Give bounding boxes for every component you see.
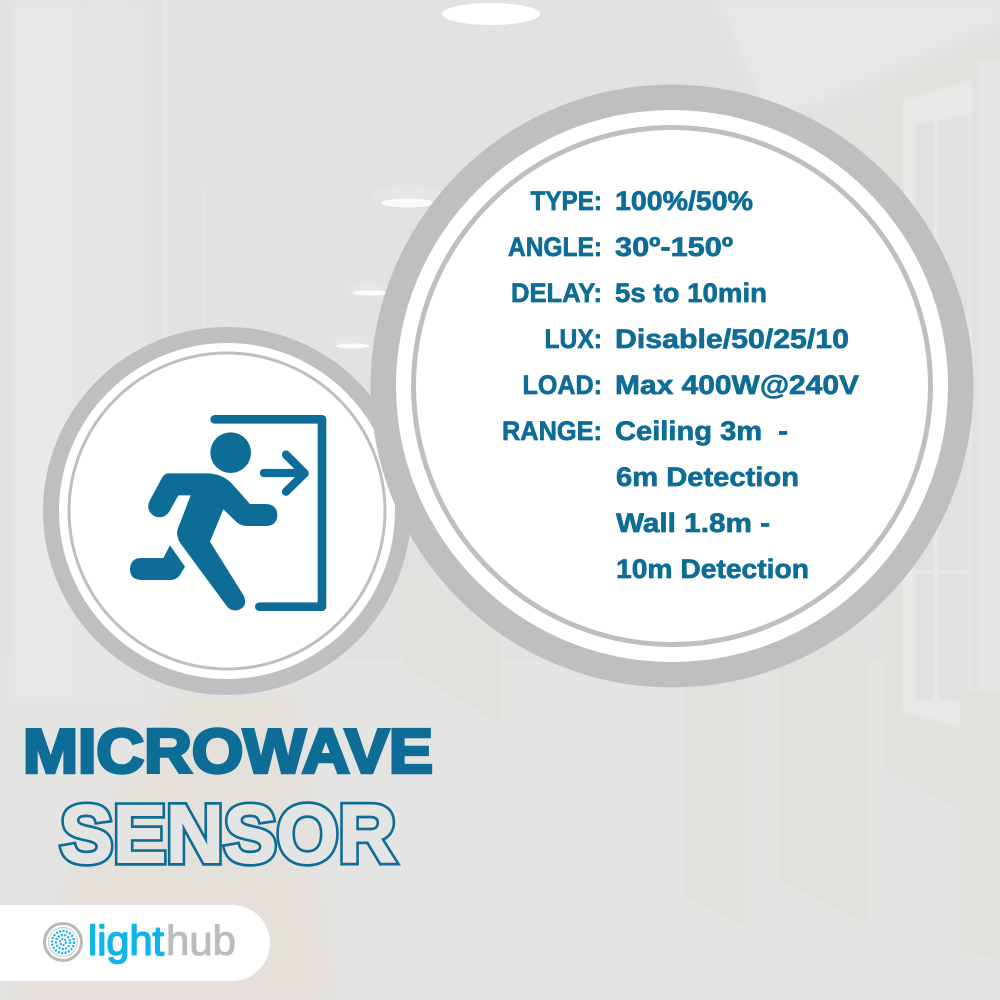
spec values: 5s to 10min <box>615 278 767 308</box>
title: MICROWAVE: MICROWAVE <box>23 718 433 786</box>
title: SENSOR outlined: SENSOR <box>60 789 396 880</box>
spec values: 10m Detection <box>616 554 809 584</box>
title: SENSOR outlined: SENSOR <box>60 789 396 880</box>
spec values: Wall 1.8m - <box>616 508 770 538</box>
panel: large specification circle <box>370 84 974 688</box>
spec labels: LUX: <box>544 324 602 354</box>
spec labels: TYPE: <box>530 186 602 216</box>
logo wordmark <box>88 917 236 964</box>
spec labels <box>502 186 602 446</box>
spec values <box>615 186 859 584</box>
logo wordmark: light <box>88 917 164 964</box>
panel: small circle with exit icon <box>43 327 411 695</box>
spec values: 100%/50% <box>615 186 753 216</box>
spec values: Ceiling 3m - <box>615 416 788 446</box>
spec values: 6m Detection <box>616 462 799 492</box>
spec labels: RANGE: <box>502 416 602 446</box>
icon: person running to exit door <box>130 419 322 610</box>
spec values: Disable/50/25/10 <box>615 324 849 354</box>
spec values: 30º-150º <box>615 232 733 262</box>
panel: logo pill <box>0 905 270 981</box>
icon: lighthub logo mark <box>44 924 82 960</box>
spec values: Max 400W@240V <box>615 370 859 400</box>
logo wordmark: hub <box>166 917 236 964</box>
spec labels: DELAY: <box>511 278 602 308</box>
spec labels: LOAD: <box>522 370 602 400</box>
spec labels: ANGLE: <box>508 232 602 262</box>
